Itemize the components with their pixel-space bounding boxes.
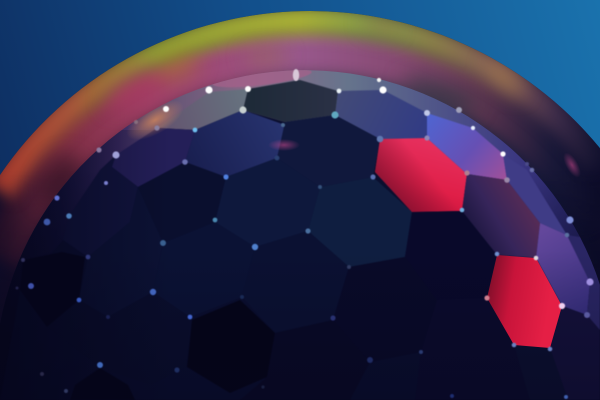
hexagon: lower left 2	[153, 222, 255, 317]
colour patches	[31, 18, 528, 212]
hexagon: bottom right	[514, 345, 568, 400]
hexagon: red lower	[487, 255, 562, 348]
hexagon: lower centre right	[333, 257, 437, 362]
bubble pink glint	[564, 154, 580, 176]
hexagon: upper blue	[335, 90, 427, 139]
glow: pink	[268, 139, 300, 151]
hexagon: bottom left panel	[47, 292, 190, 385]
lower bubble fade	[0, 182, 52, 321]
hexagon: centre right	[308, 177, 412, 267]
network nodes	[16, 69, 594, 399]
mesh backing	[88, 110, 542, 400]
hexagon: left purple	[112, 128, 195, 187]
glow: orange	[120, 92, 190, 148]
hexagon: dark below red	[416, 210, 458, 212]
hexagon: mid blue	[185, 110, 285, 177]
shell fade	[101, 189, 600, 400]
hexagon: red top	[375, 138, 467, 212]
hexagon: dark navy top	[277, 115, 380, 187]
hexagon mesh	[0, 80, 600, 400]
hexagon: red top shading	[374, 138, 454, 212]
hexagon: lower left 1	[79, 187, 163, 317]
hexagon: centre	[215, 158, 320, 247]
outer iridescent bubble	[0, 11, 600, 324]
hexagon: maroon	[462, 174, 540, 258]
hexagon: right band	[509, 171, 566, 234]
rim pink highlight	[212, 70, 312, 88]
hexagon: dark centre left	[130, 162, 226, 243]
hexagon: right purple	[536, 223, 590, 315]
hexagon: top dark	[243, 80, 338, 122]
lower shell darkening	[0, 250, 600, 400]
hexagon: far right band	[568, 236, 600, 330]
shell rim tint	[26, 70, 600, 284]
hexagon: lower right	[415, 298, 530, 400]
hexagon: purple blue	[427, 113, 507, 180]
hexagon: bottom dark small	[70, 368, 135, 400]
hexagon: grey upper	[157, 89, 248, 130]
hexagon: bottom centre	[240, 320, 370, 400]
left shell darkening	[0, 130, 170, 400]
hexagon: right of red	[551, 308, 600, 390]
hexagon: dark left	[36, 252, 84, 320]
hexagon: far left	[70, 158, 138, 254]
hexagon: bottom dark large	[187, 300, 275, 393]
hexagon: lower centre	[242, 231, 349, 333]
